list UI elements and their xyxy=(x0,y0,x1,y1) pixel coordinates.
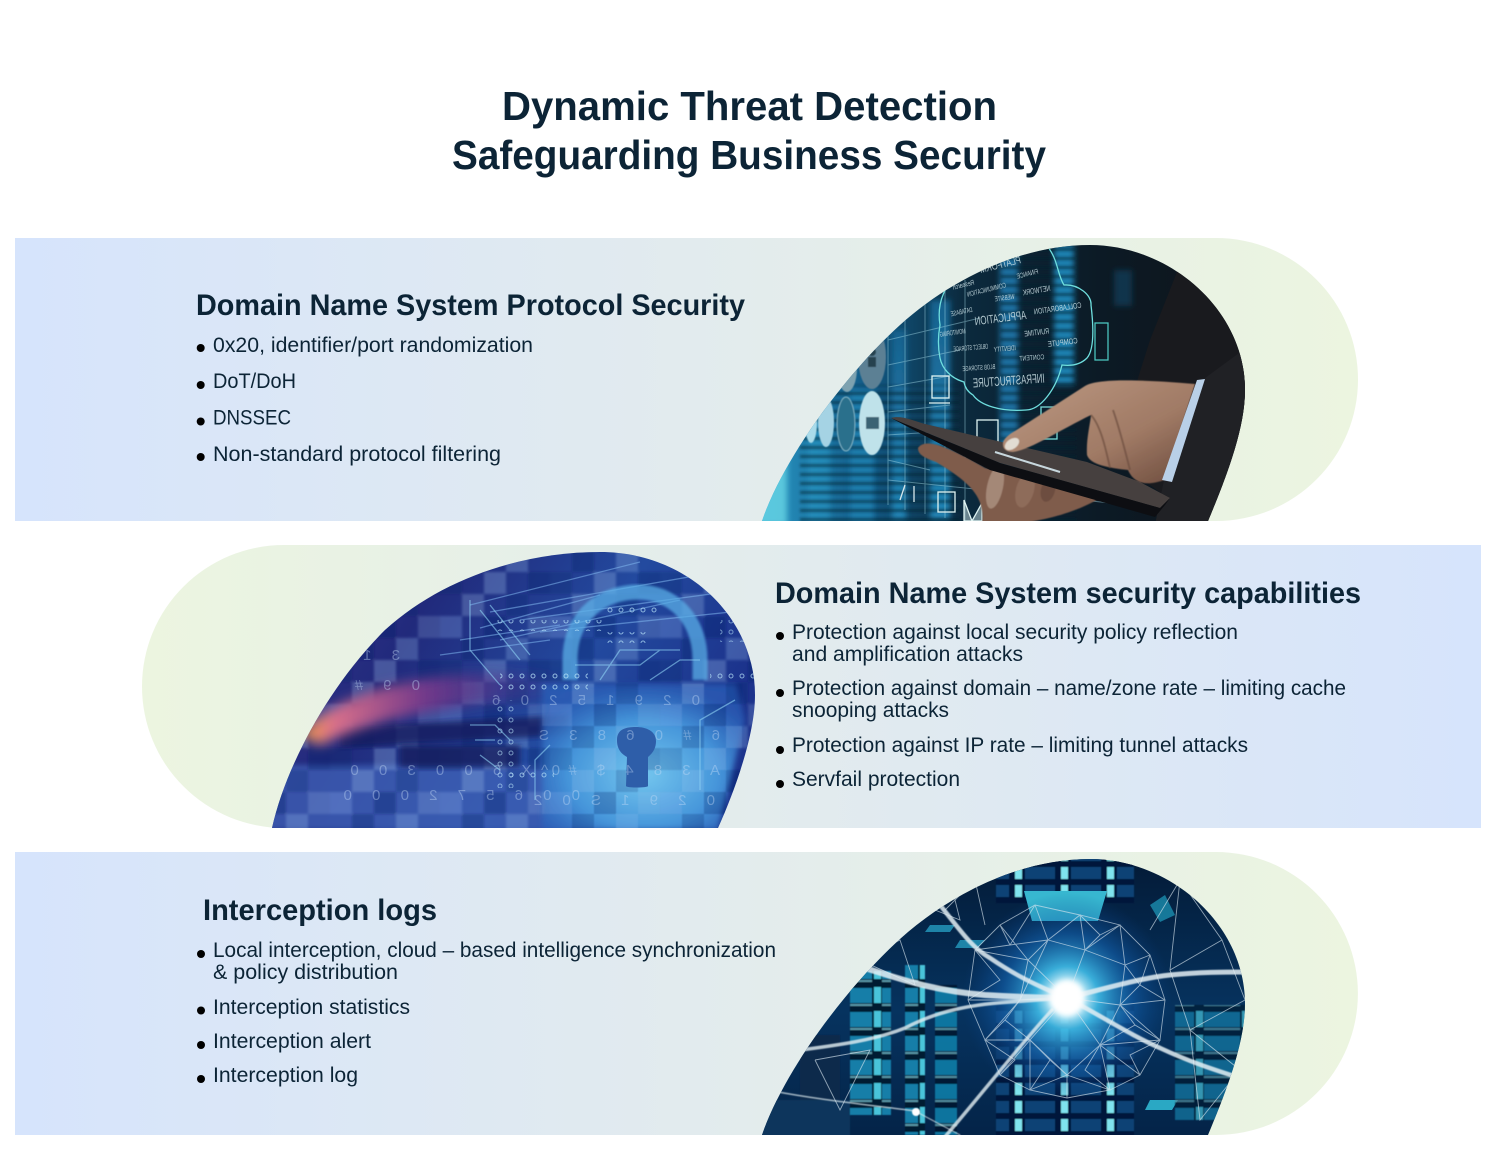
cloud labels (mirrored in the photo): IDENTITY xyxy=(993,345,1016,354)
cloud labels (mirrored in the photo): BLOB STORAGE xyxy=(962,364,996,373)
bullet list: snooping attacks xyxy=(792,699,949,722)
lower hand xyxy=(918,444,1100,525)
heading: Interception logs xyxy=(203,894,437,927)
network sphere wireframe xyxy=(815,870,1245,1120)
cloud labels (mirrored in the photo): OBJECT STORAGE xyxy=(953,343,989,354)
title: Safeguarding Business Security xyxy=(452,132,1046,178)
top and bottom server racks xyxy=(996,858,1134,1140)
suit xyxy=(1138,272,1245,521)
cloud labels (mirrored in the photo): WEBSITE xyxy=(994,294,1015,303)
bullet list: 0x20, identifier/port randomization xyxy=(213,334,533,357)
photo: digital padlock xyxy=(265,548,760,833)
digit rows (mirrored in the photo): 0 2 9 1 5 2 0 6 xyxy=(484,692,700,709)
digit rows (mirrored in the photo): 0 X 6 0 0 3 0 0 xyxy=(342,762,560,779)
cloud labels (mirrored in the photo) xyxy=(939,255,1082,391)
circuit dots xyxy=(495,620,605,631)
photo: data centre with network sphere xyxy=(755,855,1250,1140)
panel background band xyxy=(142,545,1481,828)
digit rows (mirrored in the photo): 0 2 9 1 S 0 2 xyxy=(526,792,715,809)
shirt cuff xyxy=(1162,379,1205,482)
heading: Domain Name System security capabilities xyxy=(775,577,1361,610)
circuit traces xyxy=(470,600,735,800)
top streak lines xyxy=(440,562,750,655)
keyhole xyxy=(617,727,656,788)
cloud labels (mirrored in the photo): COMMUNICATION xyxy=(966,282,1007,299)
cloud labels (mirrored in the photo): INFRASTRUCTURE xyxy=(972,371,1045,391)
cloud labels (mirrored in the photo): COMPUTE xyxy=(1047,336,1078,349)
panel: domain name system protocol security xyxy=(15,238,1358,525)
device outlines xyxy=(900,323,1108,521)
digit rows (mirrored in the photo): A 3 8 4 $ # ^ xyxy=(533,762,720,779)
cloud outline xyxy=(938,246,1093,410)
ceiling lights xyxy=(1024,891,1107,921)
lock body xyxy=(542,684,745,830)
bullet list xyxy=(197,939,776,1087)
digit rows (mirrored in the photo): 6 # 0 6 8 3 S xyxy=(531,727,720,744)
cloud labels (mirrored in the photo): FINANCE xyxy=(1016,268,1039,281)
bullet list: Interception statistics xyxy=(213,996,410,1019)
orange streak xyxy=(300,673,575,745)
panel: domain name system security capabilities xyxy=(142,545,1481,833)
centre glow xyxy=(972,898,1162,1096)
panel background band xyxy=(15,852,1358,1135)
cloud labels (mirrored in the photo): NETWORK xyxy=(1022,284,1051,297)
digit rows (mirrored in the photo) xyxy=(344,650,720,805)
digit rows (mirrored in the photo): 3 1 8 3 xyxy=(298,647,400,664)
bullet list: DNSSEC xyxy=(213,406,291,430)
bullet list: Non-standard protocol filtering xyxy=(213,443,501,466)
grid lines xyxy=(888,280,1130,521)
cloud labels (mirrored in the photo): COLLABORATION xyxy=(1033,301,1082,316)
right server racks xyxy=(1175,1005,1245,1120)
cloud labels (mirrored in the photo): PLATFORM xyxy=(979,255,1022,276)
photo: hand touching tablet with cloud interface xyxy=(755,240,1250,525)
bullet list: Protection against domain – name/zone rate – limiting cache xyxy=(792,677,1346,700)
left server racks xyxy=(760,965,957,1140)
light streaks xyxy=(773,905,1245,1138)
title: Dynamic Threat Detection xyxy=(502,83,997,129)
bullet list: Interception alert xyxy=(213,1030,371,1053)
circle icons xyxy=(806,340,886,456)
cloud labels (mirrored in the photo): APPLICATION xyxy=(974,308,1027,328)
bullet list: Servfail protection xyxy=(792,768,960,791)
cloud labels (mirrored in the photo): Research xyxy=(952,279,975,292)
lock shackle xyxy=(570,592,700,680)
pointing hand xyxy=(1003,380,1195,483)
bullet list: and amplification attacks xyxy=(792,643,1023,666)
bullet list: & policy distribution xyxy=(213,961,398,984)
blurred server columns xyxy=(755,245,1132,525)
dark streak xyxy=(339,715,570,747)
cloud labels (mirrored in the photo): MONITORING xyxy=(939,328,966,339)
title xyxy=(452,83,1046,178)
panel background band xyxy=(15,238,1358,521)
cloud labels (mirrored in the photo): RUNTIME xyxy=(1024,327,1050,339)
bullet list: Protection against local security policy reflection xyxy=(792,621,1238,644)
panel: interception logs xyxy=(15,852,1358,1140)
bullet list xyxy=(197,334,533,466)
bullet list: Local interception, cloud – based intelligence synchronization xyxy=(213,939,776,962)
digit rows (mirrored in the photo): 0 9 # E 3 xyxy=(288,677,420,694)
bullet list xyxy=(776,621,1346,791)
bullet list: DoT/DoH xyxy=(213,370,296,393)
bullet list: Protection against IP rate – limiting tunnel attacks xyxy=(792,734,1248,757)
cloud labels (mirrored in the photo): DATABASE xyxy=(950,307,973,318)
padlock xyxy=(542,592,745,830)
cloud labels (mirrored in the photo): CONTENT xyxy=(1019,354,1045,363)
digit rows (mirrored in the photo): 0 0 6 5 7 2 0 0 0 xyxy=(336,787,580,804)
tablet xyxy=(891,417,1170,508)
heading: Domain Name System Protocol Security xyxy=(196,289,745,322)
bullet list: Interception log xyxy=(213,1064,358,1087)
